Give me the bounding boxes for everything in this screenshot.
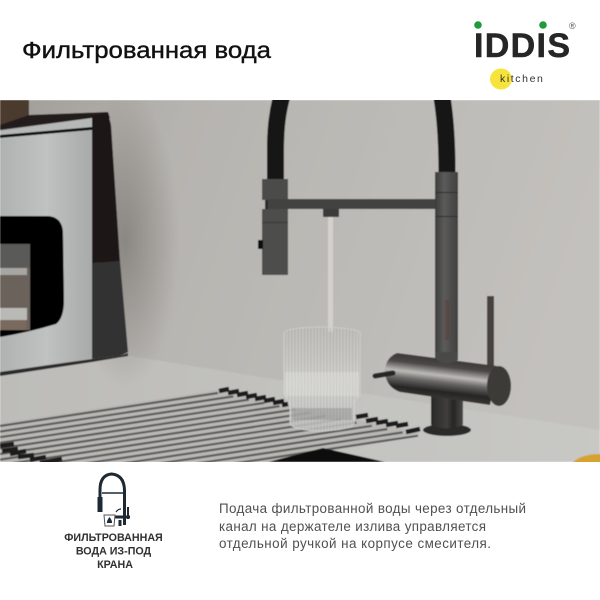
lemon xyxy=(572,454,600,462)
photo: kitchen faucet scene xyxy=(0,90,600,484)
fluted glass xyxy=(284,327,360,431)
horizontal valve cylinder xyxy=(385,352,511,406)
icon caption: КРАНА xyxy=(97,559,133,571)
faucet body xyxy=(435,172,458,364)
faucet spout hose xyxy=(276,92,447,180)
icon caption: ФИЛЬТРОВАННАЯ xyxy=(64,532,163,544)
logo: IDDIS kitchen: kitchen xyxy=(500,73,544,85)
logo: IDDIS kitchen: ® xyxy=(569,21,576,31)
spray head xyxy=(258,179,288,275)
counter xyxy=(0,357,354,456)
holder arm xyxy=(268,199,438,217)
coffee machine xyxy=(0,100,128,376)
icon caption: ВОДА ИЗ-ПОД xyxy=(76,546,152,558)
small lever xyxy=(375,373,393,376)
title: Фильтрованная вода xyxy=(22,37,271,63)
water stream xyxy=(328,217,333,332)
shadow on wall beside machine xyxy=(110,120,170,367)
description text: Подача фильтрованной воды через отдельный xyxy=(219,501,526,516)
base stem and foot xyxy=(423,390,471,436)
wall xyxy=(0,100,600,462)
handle lever xyxy=(487,296,494,368)
description text: канал на держателе излива управляется xyxy=(219,519,486,534)
black sink opening xyxy=(268,448,385,462)
drying mat xyxy=(0,386,421,462)
description text: отдельной ручкой на корпусе смесителя. xyxy=(219,536,491,551)
logo: IDDIS kitchen: IDDIS xyxy=(474,27,570,65)
logo: IDDIS kitchen xyxy=(474,21,576,90)
icon: filtered water faucet xyxy=(100,474,130,526)
